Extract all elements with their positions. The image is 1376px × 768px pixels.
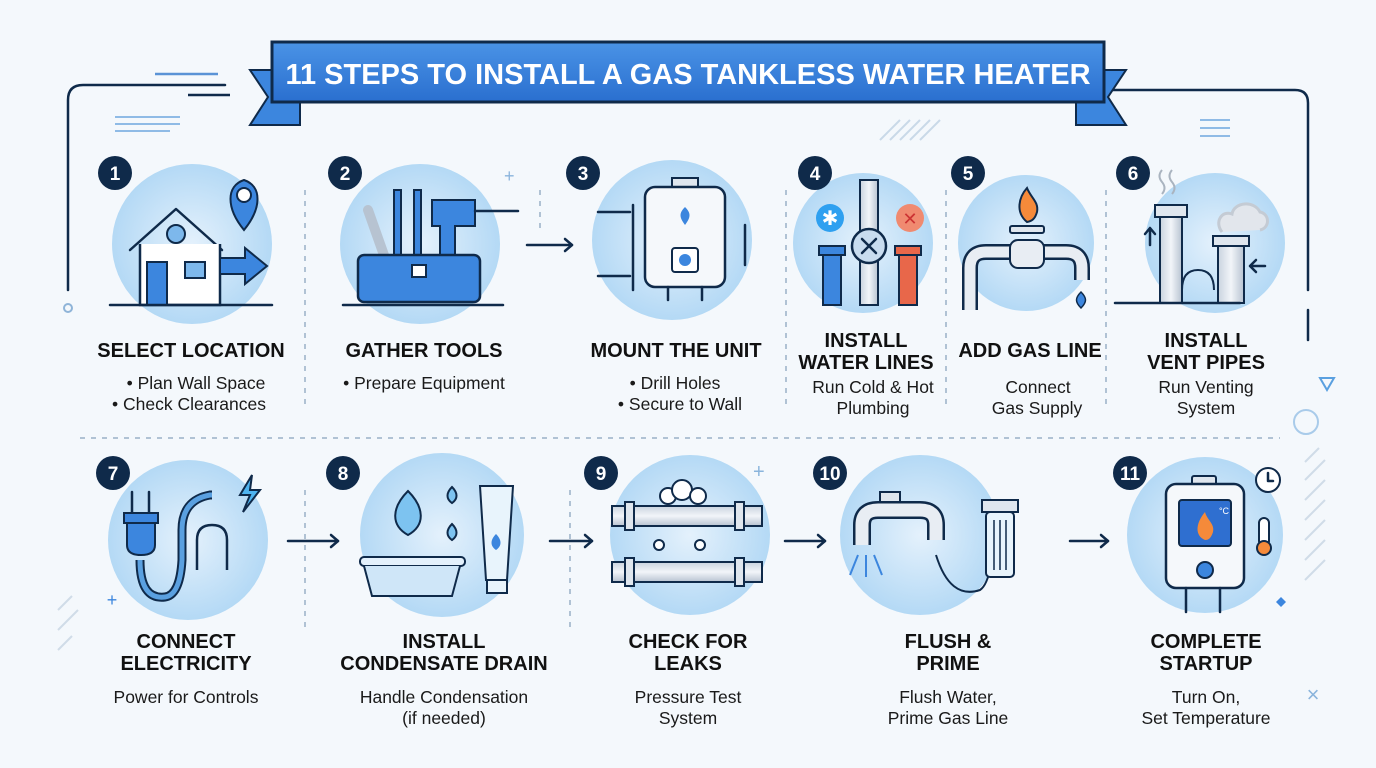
step 6: install vent pipes: 6 [1128, 164, 1138, 185]
step 8: install condensate drain: INSTALL [403, 631, 485, 653]
step 10: flush & prime: Prime Gas Line [888, 708, 1008, 728]
arrow 2 to 3 [527, 239, 572, 251]
title banner: 11 STEPS TO INSTALL A GAS TANKLESS WATER HEATER [285, 59, 1091, 91]
step 11: complete startup: °C [1219, 506, 1230, 516]
step 1: select location: 1 [110, 164, 121, 185]
step 4: install water lines: Plumbing [837, 398, 909, 418]
step 3: mount the unit: 3 [578, 164, 588, 185]
step 2: gather tools: GATHER TOOLS [345, 340, 503, 362]
step 7: connect electricity: CONNECT [137, 631, 235, 653]
frame outline [58, 74, 1334, 707]
step 5: add gas line: 5 [963, 164, 974, 185]
step 2: gather tools [328, 156, 518, 393]
step 4: install water lines [793, 156, 934, 418]
arrow 8 to 9 [550, 535, 592, 547]
step 9: check for leaks [584, 455, 770, 728]
step 3: mount the unit: MOUNT THE UNIT [590, 340, 762, 362]
step 3: mount the unit [566, 156, 762, 414]
step 6: install vent pipes [1115, 156, 1285, 418]
step 6: install vent pipes: System [1177, 398, 1235, 418]
step 11: complete startup: 11 [1120, 464, 1140, 485]
arrow 10 to 11 [1070, 535, 1108, 547]
step 7: connect electricity: ELECTRICITY [120, 653, 252, 675]
step 9: check for leaks: CHECK FOR [629, 631, 748, 653]
step 10: flush & prime: Flush Water, [899, 687, 997, 707]
step 5: add gas line: ADD GAS LINE [958, 340, 1102, 362]
step 11: complete startup [1113, 456, 1286, 728]
step 9: check for leaks: 9 [596, 464, 606, 485]
step 7: connect electricity: 7 [108, 464, 118, 485]
step 3: mount the unit: • Secure to Wall [618, 394, 742, 414]
step 9: check for leaks: + [753, 461, 765, 483]
title banner [250, 42, 1126, 125]
step 8: install condensate drain: (if needed) [402, 708, 486, 728]
step 10: flush & prime: PRIME [916, 653, 980, 675]
step 4: install water lines: 4 [810, 164, 821, 185]
step 4: install water lines: ✕ [902, 209, 918, 230]
step 4: install water lines: ✱ [822, 206, 838, 230]
step 7: connect electricity [96, 456, 268, 707]
step 4: install water lines: WATER LINES [798, 352, 934, 374]
step 5: add gas line [951, 156, 1102, 418]
step 6: install vent pipes: VENT PIPES [1147, 352, 1265, 374]
step 10: flush & prime: 10 [819, 464, 841, 485]
step 9: check for leaks: LEAKS [654, 653, 722, 675]
step 2: gather tools: • Prepare Equipment [343, 373, 505, 393]
step 7: connect electricity: Power for Controls [114, 687, 259, 707]
arrow 9 to 10 [785, 535, 825, 547]
step 7: connect electricity: + [107, 590, 117, 610]
step 9: check for leaks: System [659, 708, 717, 728]
step 9: check for leaks: Pressure Test [635, 687, 741, 707]
step 11: complete startup: Set Temperature [1141, 708, 1271, 728]
step 5: add gas line: Connect [1005, 377, 1071, 397]
step 1: select location [97, 156, 285, 414]
step 5: add gas line: Gas Supply [992, 398, 1082, 418]
step 11: complete startup: Turn On, [1172, 687, 1240, 707]
step 10: flush & prime [813, 455, 1018, 728]
step 4: install water lines: INSTALL [825, 330, 907, 352]
step 11: complete startup: COMPLETE [1150, 631, 1262, 653]
dividers [80, 190, 1280, 630]
step 10: flush & prime: FLUSH & [905, 631, 991, 653]
step 11: complete startup: STARTUP [1160, 653, 1252, 675]
step 8: install condensate drain: Handle Condensation [360, 687, 528, 707]
step 8: install condensate drain: CONDENSATE DRAIN [340, 653, 548, 675]
step 1: select location: • Check Clearances [112, 394, 266, 414]
step 1: select location: SELECT LOCATION [97, 340, 285, 362]
step 8: install condensate drain [326, 453, 548, 728]
step 3: mount the unit: • Drill Holes [630, 373, 721, 393]
frame outline: × [1307, 682, 1319, 707]
icon: house [110, 180, 272, 305]
arrow 7 to 8 [288, 535, 338, 547]
step 4: install water lines: Run Cold & Hot [812, 377, 934, 397]
step 1: select location: • Plan Wall Space [127, 373, 265, 393]
step 6: install vent pipes: INSTALL [1165, 330, 1247, 352]
step 6: install vent pipes: Run Venting [1158, 377, 1254, 397]
step 2: gather tools: + [504, 166, 515, 186]
step 8: install condensate drain: 8 [338, 464, 348, 485]
step 2: gather tools: 2 [340, 164, 350, 185]
